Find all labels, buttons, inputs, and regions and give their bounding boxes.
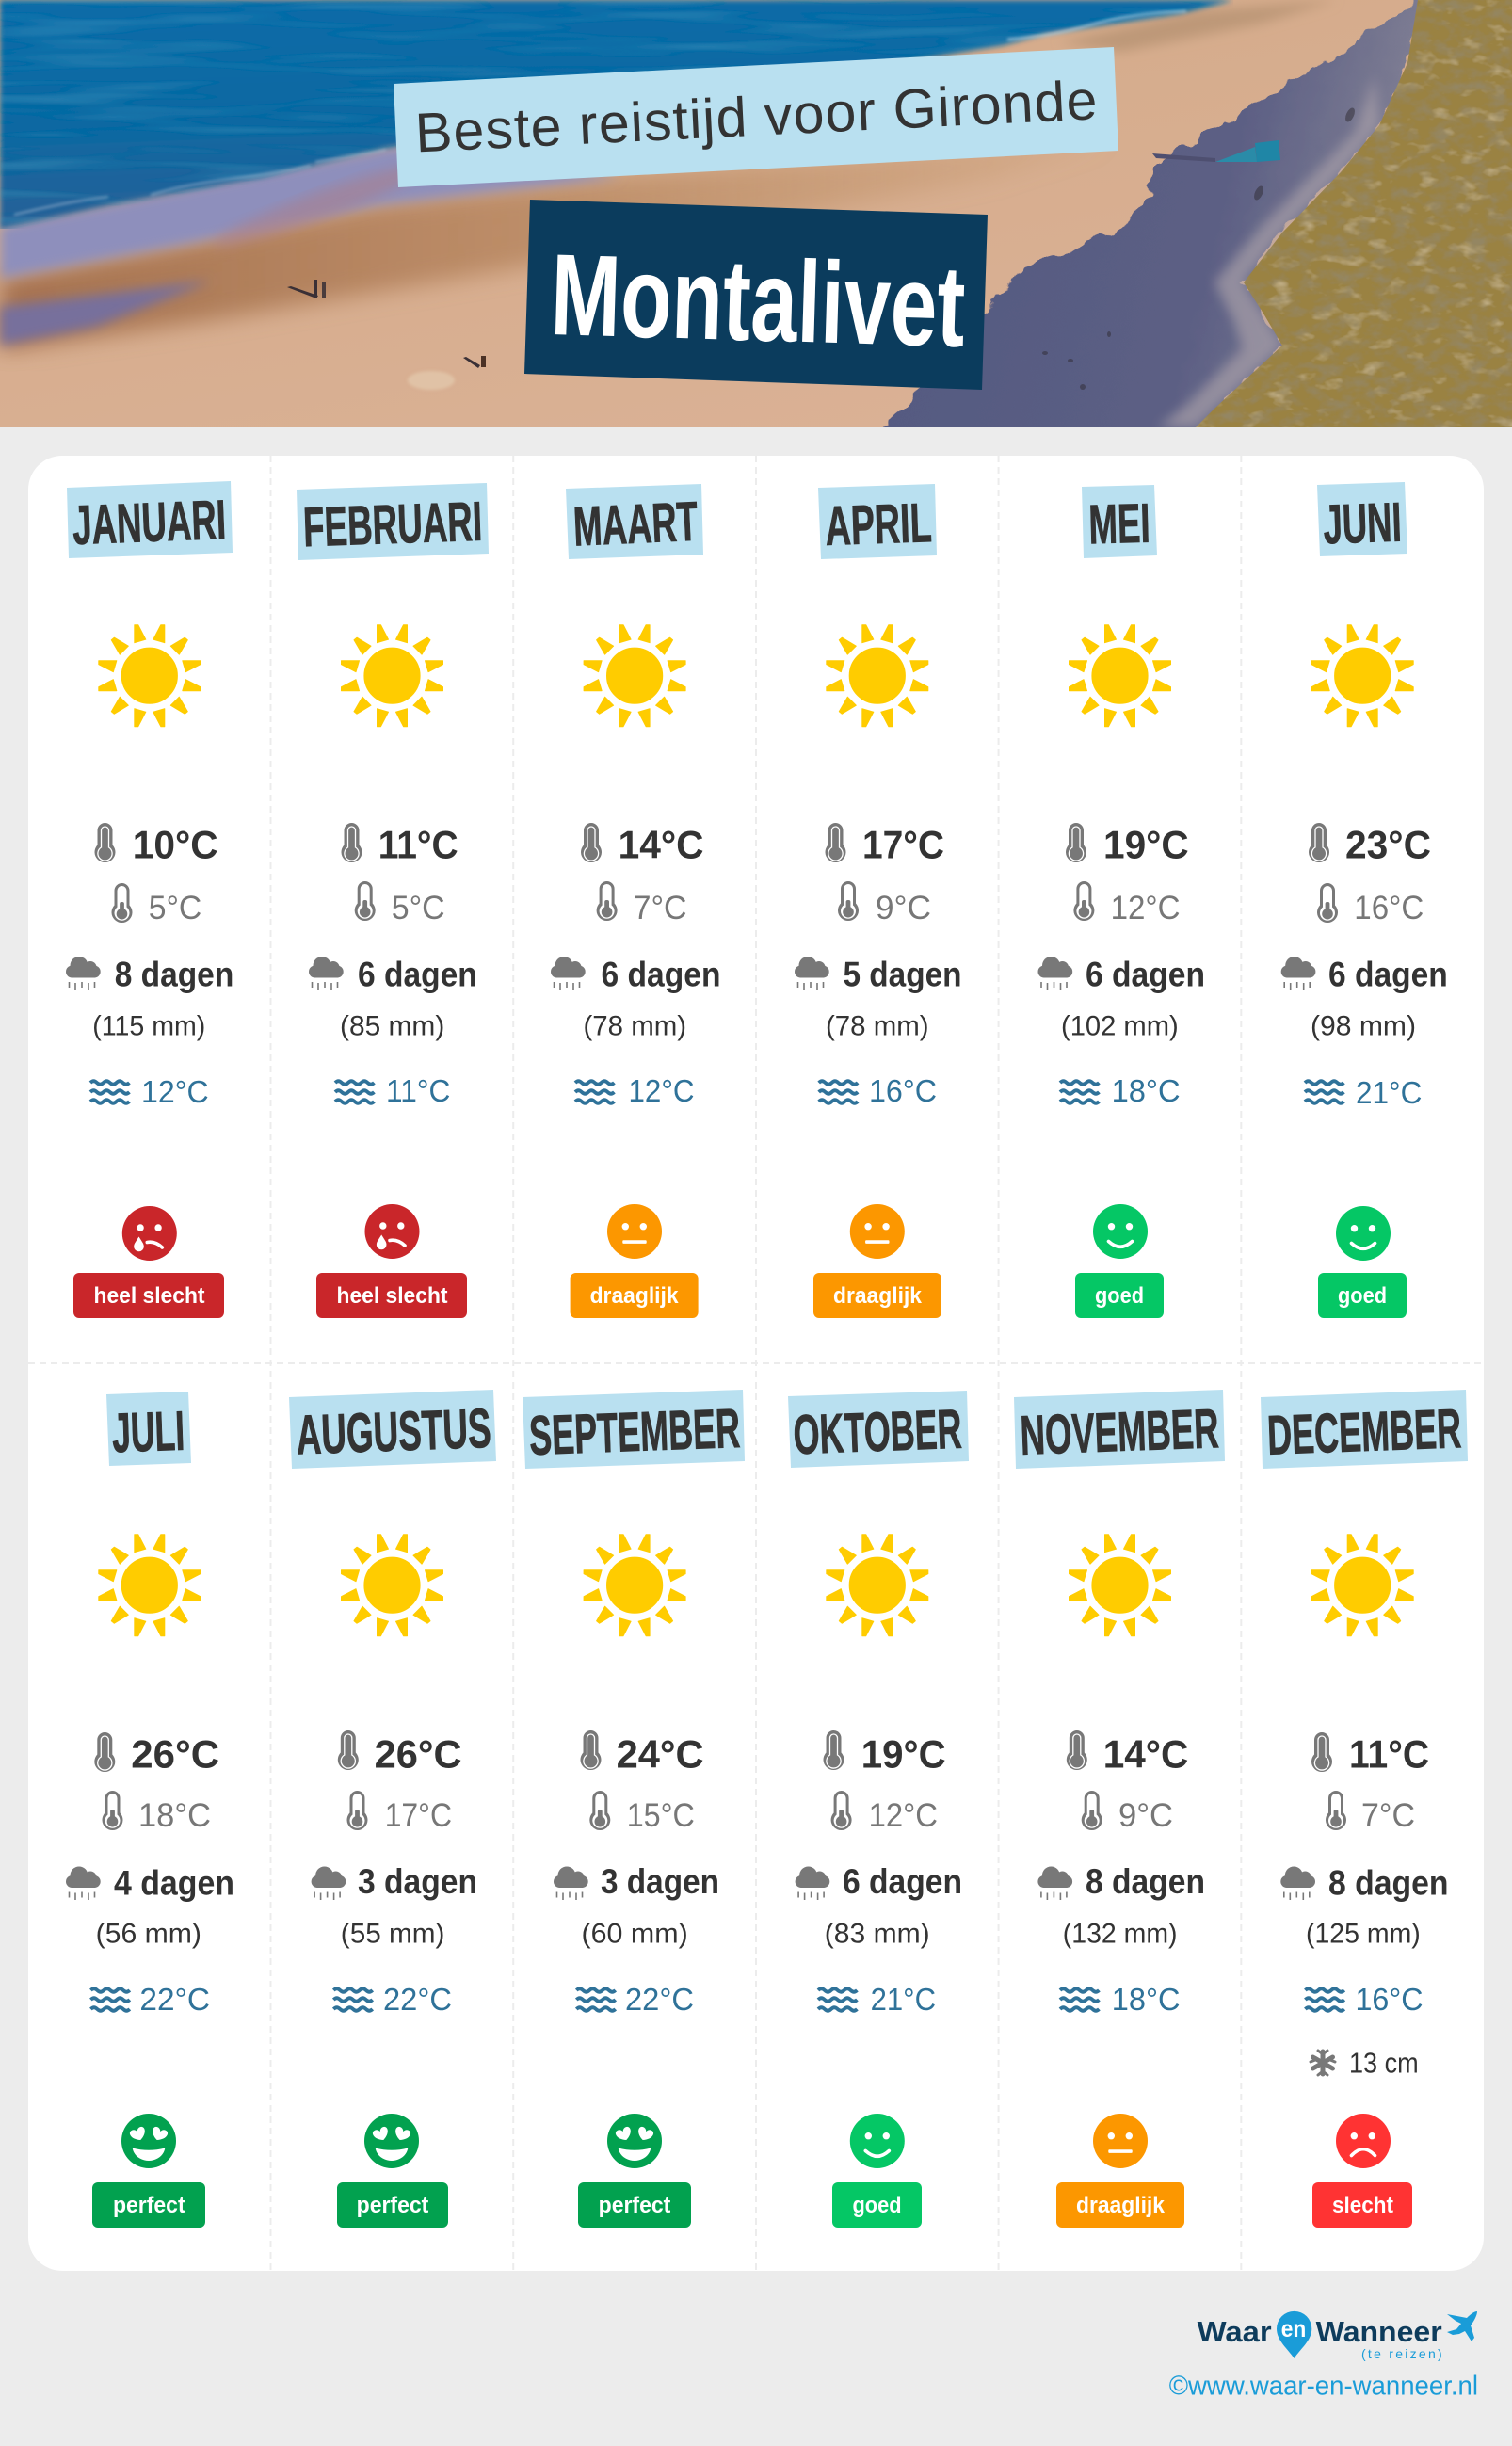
panel: climate table card [28, 456, 1484, 2271]
icon: sun [1070, 1535, 1171, 1636]
logo: Waar en Wanneer: en [1281, 2316, 1306, 2342]
min temperature: 5°C [149, 890, 201, 926]
rating label: draaglijk: draaglijk [590, 1283, 679, 1309]
min temperature [831, 1791, 938, 1834]
max temperature [1311, 1732, 1429, 1777]
rating label: perfect: perfect [113, 2193, 185, 2218]
rain days: 3 dagen [358, 1862, 477, 1901]
min temperature: 9°C [876, 890, 931, 926]
logo: Waar en Wanneer: (te reizen) [1361, 2346, 1442, 2361]
rating label: draaglijk [813, 1273, 941, 1318]
min temperature: 12°C [869, 1797, 938, 1834]
month heading: juni: JUNI [1322, 491, 1403, 555]
max temperature [823, 1730, 946, 1777]
source url: ©www.waar-en-wanneer.nl [1169, 2371, 1478, 2401]
rating label: goed [832, 2182, 922, 2228]
rain days: 3 dagen [601, 1862, 719, 1901]
min temperature [346, 1791, 452, 1834]
rain days [554, 1862, 719, 1901]
max temperature: 26°C [375, 1732, 462, 1777]
rain days: 5 dagen [844, 956, 962, 994]
month heading: maart: MAART [572, 491, 699, 558]
month heading: april: APRIL [824, 491, 933, 557]
rain days: 6 dagen [1086, 956, 1205, 994]
rating face: goed [850, 2114, 905, 2168]
column: augustus [289, 1390, 496, 2228]
sea temperature: 11°C [386, 1073, 450, 1108]
rain days [312, 1862, 477, 1901]
min temperature: 7°C [1361, 1797, 1415, 1834]
max temperature [94, 823, 218, 867]
rating label: perfect [578, 2182, 691, 2228]
sea temperature: 22°C [383, 1982, 452, 2017]
max temperature [341, 823, 458, 867]
min temperature: 16°C [1354, 890, 1424, 926]
month heading: juni [1317, 482, 1407, 556]
rain days: 8 dagen [1086, 1862, 1205, 1901]
max temperature: 10°C [133, 823, 218, 867]
month heading: januari [67, 481, 233, 558]
sea temperature [335, 1073, 450, 1108]
title: Montalivet banner: Montalivet [549, 231, 967, 372]
month heading: mei [1082, 485, 1157, 558]
rain days [1280, 1864, 1448, 1903]
rainfall: (55 mm) [341, 1918, 444, 1949]
rating face: goed [1093, 1204, 1148, 1259]
max temperature: 17°C [862, 823, 944, 867]
sea temperature [1305, 1075, 1422, 1110]
rating face: perfect [364, 2114, 419, 2168]
rating face: slecht [1336, 2114, 1391, 2168]
rating label: perfect [92, 2182, 205, 2228]
icon: sun [99, 625, 201, 727]
month heading: februari [297, 483, 489, 560]
icon: sun [1311, 1535, 1413, 1636]
sea temperature [1305, 1982, 1424, 2017]
min temperature [1326, 1791, 1415, 1834]
min temperature [102, 1791, 211, 1834]
min temperature [355, 881, 445, 926]
max temperature [1067, 1730, 1188, 1777]
rainfall: (132 mm) [1063, 1918, 1177, 1949]
sea temperature: 12°C [141, 1074, 209, 1109]
month heading: juli [106, 1392, 191, 1466]
rating label: goed: goed [1095, 1283, 1144, 1309]
icon: sun [1311, 625, 1413, 727]
sea temperature: 21°C [1356, 1075, 1422, 1110]
rating face: heel slecht [365, 1204, 420, 1259]
month heading: november: NOVEMBER [1019, 1397, 1220, 1467]
sea temperature: 22°C [625, 1982, 694, 2017]
rain days: 8 dagen [115, 956, 233, 994]
rainfall: (102 mm) [1061, 1011, 1179, 1041]
column: juli [66, 1392, 234, 2228]
rain days: 8 dagen [1328, 1864, 1448, 1903]
min temperature [1073, 881, 1181, 926]
rain days [795, 956, 962, 994]
rain days: 6 dagen [1328, 956, 1448, 994]
max temperature [825, 823, 944, 867]
column: mei [1037, 485, 1205, 1318]
rating face: draaglijk [1093, 2114, 1148, 2168]
max temperature [1309, 823, 1431, 867]
rain days: 6 dagen [843, 1862, 962, 1901]
rainfall: (60 mm) [582, 1918, 688, 1949]
rating label: heel slecht: heel slecht [94, 1283, 205, 1309]
min temperature [838, 881, 931, 926]
rain days [66, 1864, 234, 1903]
rain days [796, 1862, 962, 1901]
max temperature [338, 1730, 462, 1777]
rain days [309, 956, 477, 994]
max temperature [1066, 823, 1189, 867]
max temperature: 14°C [1103, 1732, 1188, 1777]
sea temperature [576, 1982, 694, 2017]
column: januari [66, 481, 233, 1318]
month heading: april [818, 484, 937, 559]
rating face: draaglijk [850, 1204, 905, 1259]
month heading: augustus [289, 1390, 496, 1469]
hero photo: beach seen from above [0, 0, 1512, 437]
rating label: goed: goed [853, 2193, 902, 2218]
month heading: oktober [788, 1391, 969, 1468]
logo: Waar en Wanneer [1198, 2311, 1477, 2361]
heading: beste reistijd banner [394, 47, 1118, 187]
max temperature: 23°C [1345, 823, 1431, 867]
rating label: goed [1318, 1273, 1407, 1318]
max temperature: 14°C [619, 823, 704, 867]
logo: Waar en Wanneer: Waar [1198, 2315, 1272, 2348]
icon: sun [1070, 625, 1171, 727]
rain days [1037, 1862, 1205, 1901]
snowfall: 13 cm [1349, 2047, 1419, 2080]
month heading: februari: FEBRUARI [302, 491, 483, 558]
icon: sun [584, 1535, 685, 1636]
rain days [66, 956, 233, 994]
rating label: draaglijk [1056, 2182, 1184, 2228]
min temperature: 18°C [138, 1797, 211, 1834]
icon: sun [827, 625, 928, 727]
sea temperature [1060, 1073, 1181, 1108]
title: Montalivet banner [524, 200, 988, 390]
rating face: perfect [607, 2114, 662, 2168]
min temperature: 12°C [1111, 890, 1181, 926]
heading: beste reistijd banner: Beste reistijd voor Gironde [413, 69, 1099, 164]
column: april [795, 484, 962, 1318]
min temperature [1317, 883, 1424, 926]
rainfall: (98 mm) [1311, 1011, 1416, 1041]
rating label: goed: goed [1338, 1283, 1387, 1309]
month heading: november [1014, 1390, 1225, 1469]
sea temperature [90, 1982, 210, 2017]
rating label: draaglijk: draaglijk [833, 1283, 923, 1309]
column: november [1014, 1390, 1225, 2228]
sea temperature [819, 1073, 937, 1108]
rainfall: (85 mm) [340, 1011, 444, 1041]
rainfall: (83 mm) [825, 1918, 930, 1949]
month heading: september: SEPTEMBER [528, 1397, 741, 1467]
month heading: september [523, 1390, 745, 1469]
month heading: juli: JULI [111, 1400, 185, 1464]
sea temperature: 21°C [871, 1982, 936, 2017]
rainfall: (56 mm) [96, 1918, 201, 1949]
sea temperature [1060, 1982, 1181, 2017]
month heading: januari: JANUARI [72, 489, 227, 556]
max temperature [581, 823, 704, 867]
max temperature: 11°C [378, 823, 458, 867]
min temperature: 9°C [1118, 1797, 1173, 1834]
column: juni [1281, 482, 1448, 1318]
rating label: goed [1075, 1273, 1164, 1318]
icon: sun [99, 1535, 201, 1636]
column: oktober [788, 1391, 969, 2228]
rating face: heel slecht [122, 1206, 177, 1261]
rainfall: (78 mm) [826, 1011, 929, 1041]
rainfall: (115 mm) [92, 1011, 205, 1041]
min temperature [597, 881, 687, 926]
sea temperature: 16°C [1356, 1982, 1424, 2017]
min temperature: 5°C [392, 890, 445, 926]
rating label: perfect: perfect [599, 2193, 670, 2218]
rating label: perfect [337, 2182, 448, 2228]
rainfall: (78 mm) [584, 1011, 686, 1041]
snowfall [1311, 2047, 1419, 2080]
column: september [523, 1390, 745, 2228]
rain days: 6 dagen [601, 956, 721, 994]
sea temperature [333, 1982, 452, 2017]
rating label: heel slecht: heel slecht [337, 1283, 448, 1309]
rating label: heel slecht [316, 1273, 467, 1318]
min temperature: 17°C [385, 1797, 452, 1834]
sea temperature [90, 1074, 209, 1109]
column: maart [551, 484, 721, 1318]
icon: sun [341, 625, 442, 727]
sea temperature: 12°C [629, 1073, 695, 1108]
max temperature: 19°C [861, 1732, 946, 1777]
min temperature: 7°C [634, 890, 687, 926]
rain days: 4 dagen [114, 1864, 234, 1903]
min temperature: 15°C [627, 1797, 695, 1834]
min temperature [111, 883, 201, 926]
sea temperature [818, 1982, 936, 2017]
rating face: goed [1336, 1206, 1391, 1261]
month heading: mei: MEI [1088, 492, 1150, 555]
rating face: perfect [121, 2114, 176, 2168]
sea temperature: 22°C [139, 1982, 210, 2017]
icon: sun [584, 625, 685, 727]
sea temperature [575, 1073, 695, 1108]
column: december [1261, 1390, 1468, 2228]
month heading: maart [566, 484, 703, 559]
min temperature [1082, 1791, 1173, 1834]
rating label: slecht: slecht [1332, 2193, 1393, 2218]
max temperature: 11°C [1349, 1732, 1429, 1777]
month heading: augustus: AUGUSTUS [295, 1397, 492, 1466]
rain days [1281, 956, 1448, 994]
min temperature [589, 1791, 695, 1834]
max temperature [580, 1730, 704, 1777]
rating label: heel slecht [73, 1273, 224, 1318]
icon: sun [341, 1535, 442, 1636]
sea temperature: 16°C [869, 1073, 937, 1108]
max temperature: 24°C [617, 1732, 704, 1777]
sea temperature: 18°C [1112, 1073, 1181, 1108]
rain days: 6 dagen [358, 956, 477, 994]
rating face: draaglijk [607, 1204, 662, 1259]
rain days [1037, 956, 1205, 994]
icon: sun [827, 1535, 928, 1636]
month heading: oktober: OKTOBER [792, 1398, 963, 1466]
logo: Waar en Wanneer: Wanneer [1316, 2315, 1442, 2348]
rating label: perfect: perfect [357, 2193, 428, 2218]
column: februari [297, 483, 489, 1318]
max temperature: 26°C [131, 1732, 219, 1777]
rating label: draaglijk [571, 1273, 699, 1318]
rainfall: (125 mm) [1306, 1918, 1421, 1949]
sea temperature: 18°C [1112, 1982, 1181, 2017]
rating label: slecht [1312, 2182, 1412, 2228]
rain days [551, 956, 721, 994]
rating label: draaglijk: draaglijk [1076, 2193, 1166, 2218]
max temperature: 19°C [1103, 823, 1189, 867]
